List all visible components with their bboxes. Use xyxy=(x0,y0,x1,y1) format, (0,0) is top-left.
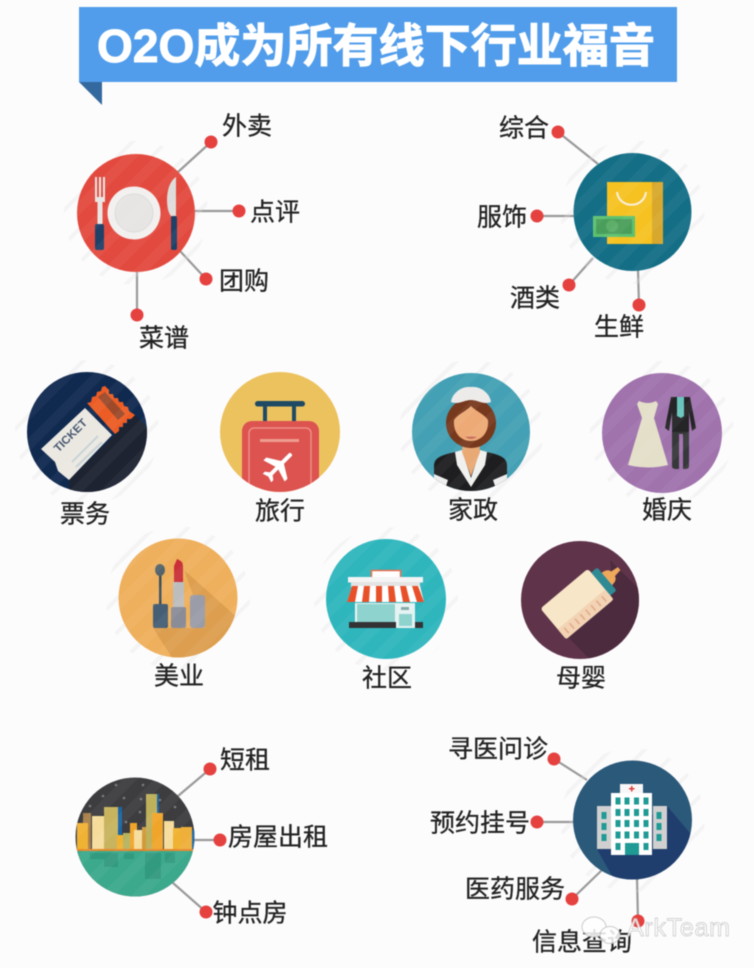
icon: hospital xyxy=(570,760,693,892)
panel: wedding xyxy=(590,361,734,524)
label: 短租 xyxy=(220,746,270,774)
label: 家政 xyxy=(448,496,498,524)
icon: suitcase xyxy=(220,372,340,501)
label: 钟点房 xyxy=(212,900,288,928)
label: 酒类 xyxy=(510,284,560,312)
label: 综合 xyxy=(499,114,549,142)
label: 生鲜 xyxy=(594,314,644,342)
label: 房屋出租 xyxy=(228,824,328,852)
label: 预约挂号 xyxy=(430,810,530,838)
connector lines xyxy=(537,759,638,921)
label: 票务 xyxy=(60,500,110,528)
label: 医药服务 xyxy=(465,876,565,904)
icon: maid xyxy=(411,372,531,492)
label: 母婴 xyxy=(556,664,606,692)
icon: baby bottle xyxy=(520,540,640,660)
label: 信息查询 xyxy=(532,928,632,956)
watermark text: ArkTeam xyxy=(627,914,730,942)
icon: city skyline xyxy=(70,778,200,900)
dots xyxy=(130,136,246,322)
panel: tickets xyxy=(26,371,148,526)
label: 社区 xyxy=(362,664,412,692)
panel: mother and baby xyxy=(521,541,650,692)
banner background xyxy=(79,7,677,82)
dots xyxy=(200,762,226,918)
panel: community xyxy=(314,527,458,692)
icon: dress and suit xyxy=(590,361,734,505)
label: 婚庆 xyxy=(642,496,692,524)
panel: healthcare cluster xyxy=(430,736,704,956)
icon: chat bubbles xyxy=(582,917,620,944)
label: 旅行 xyxy=(255,498,305,526)
icon: ticket xyxy=(26,371,148,493)
title: O2O成为所有线下行业福音 xyxy=(97,20,655,72)
connector lines xyxy=(137,142,239,315)
label: 团购 xyxy=(219,268,269,296)
dots xyxy=(530,752,644,928)
panel: travel xyxy=(220,372,340,526)
icon: mascara and lipstick xyxy=(118,538,238,658)
title banner xyxy=(79,7,677,105)
connector lines xyxy=(537,132,639,305)
label: 外卖 xyxy=(222,112,272,140)
label: 服饰 xyxy=(477,204,527,232)
panel: housekeeping xyxy=(411,372,531,522)
panel: food cluster xyxy=(64,112,300,352)
icon: plate and cutlery xyxy=(64,141,208,285)
label: 美业 xyxy=(154,662,204,690)
icon: ticket: TICKET xyxy=(52,417,90,455)
watermark xyxy=(582,914,730,944)
panel: beauty xyxy=(118,538,238,688)
label: 寻医问诊 xyxy=(448,736,548,764)
label: 菜谱 xyxy=(139,324,189,352)
label: 点评 xyxy=(250,198,300,226)
icon: storefront xyxy=(314,527,458,671)
icon: shopping bag and cash xyxy=(560,140,704,284)
ribbon fold xyxy=(79,82,102,105)
connector lines xyxy=(173,769,220,912)
panel: retail cluster xyxy=(477,114,704,342)
dots xyxy=(530,126,646,312)
panel: housing cluster xyxy=(70,746,328,928)
